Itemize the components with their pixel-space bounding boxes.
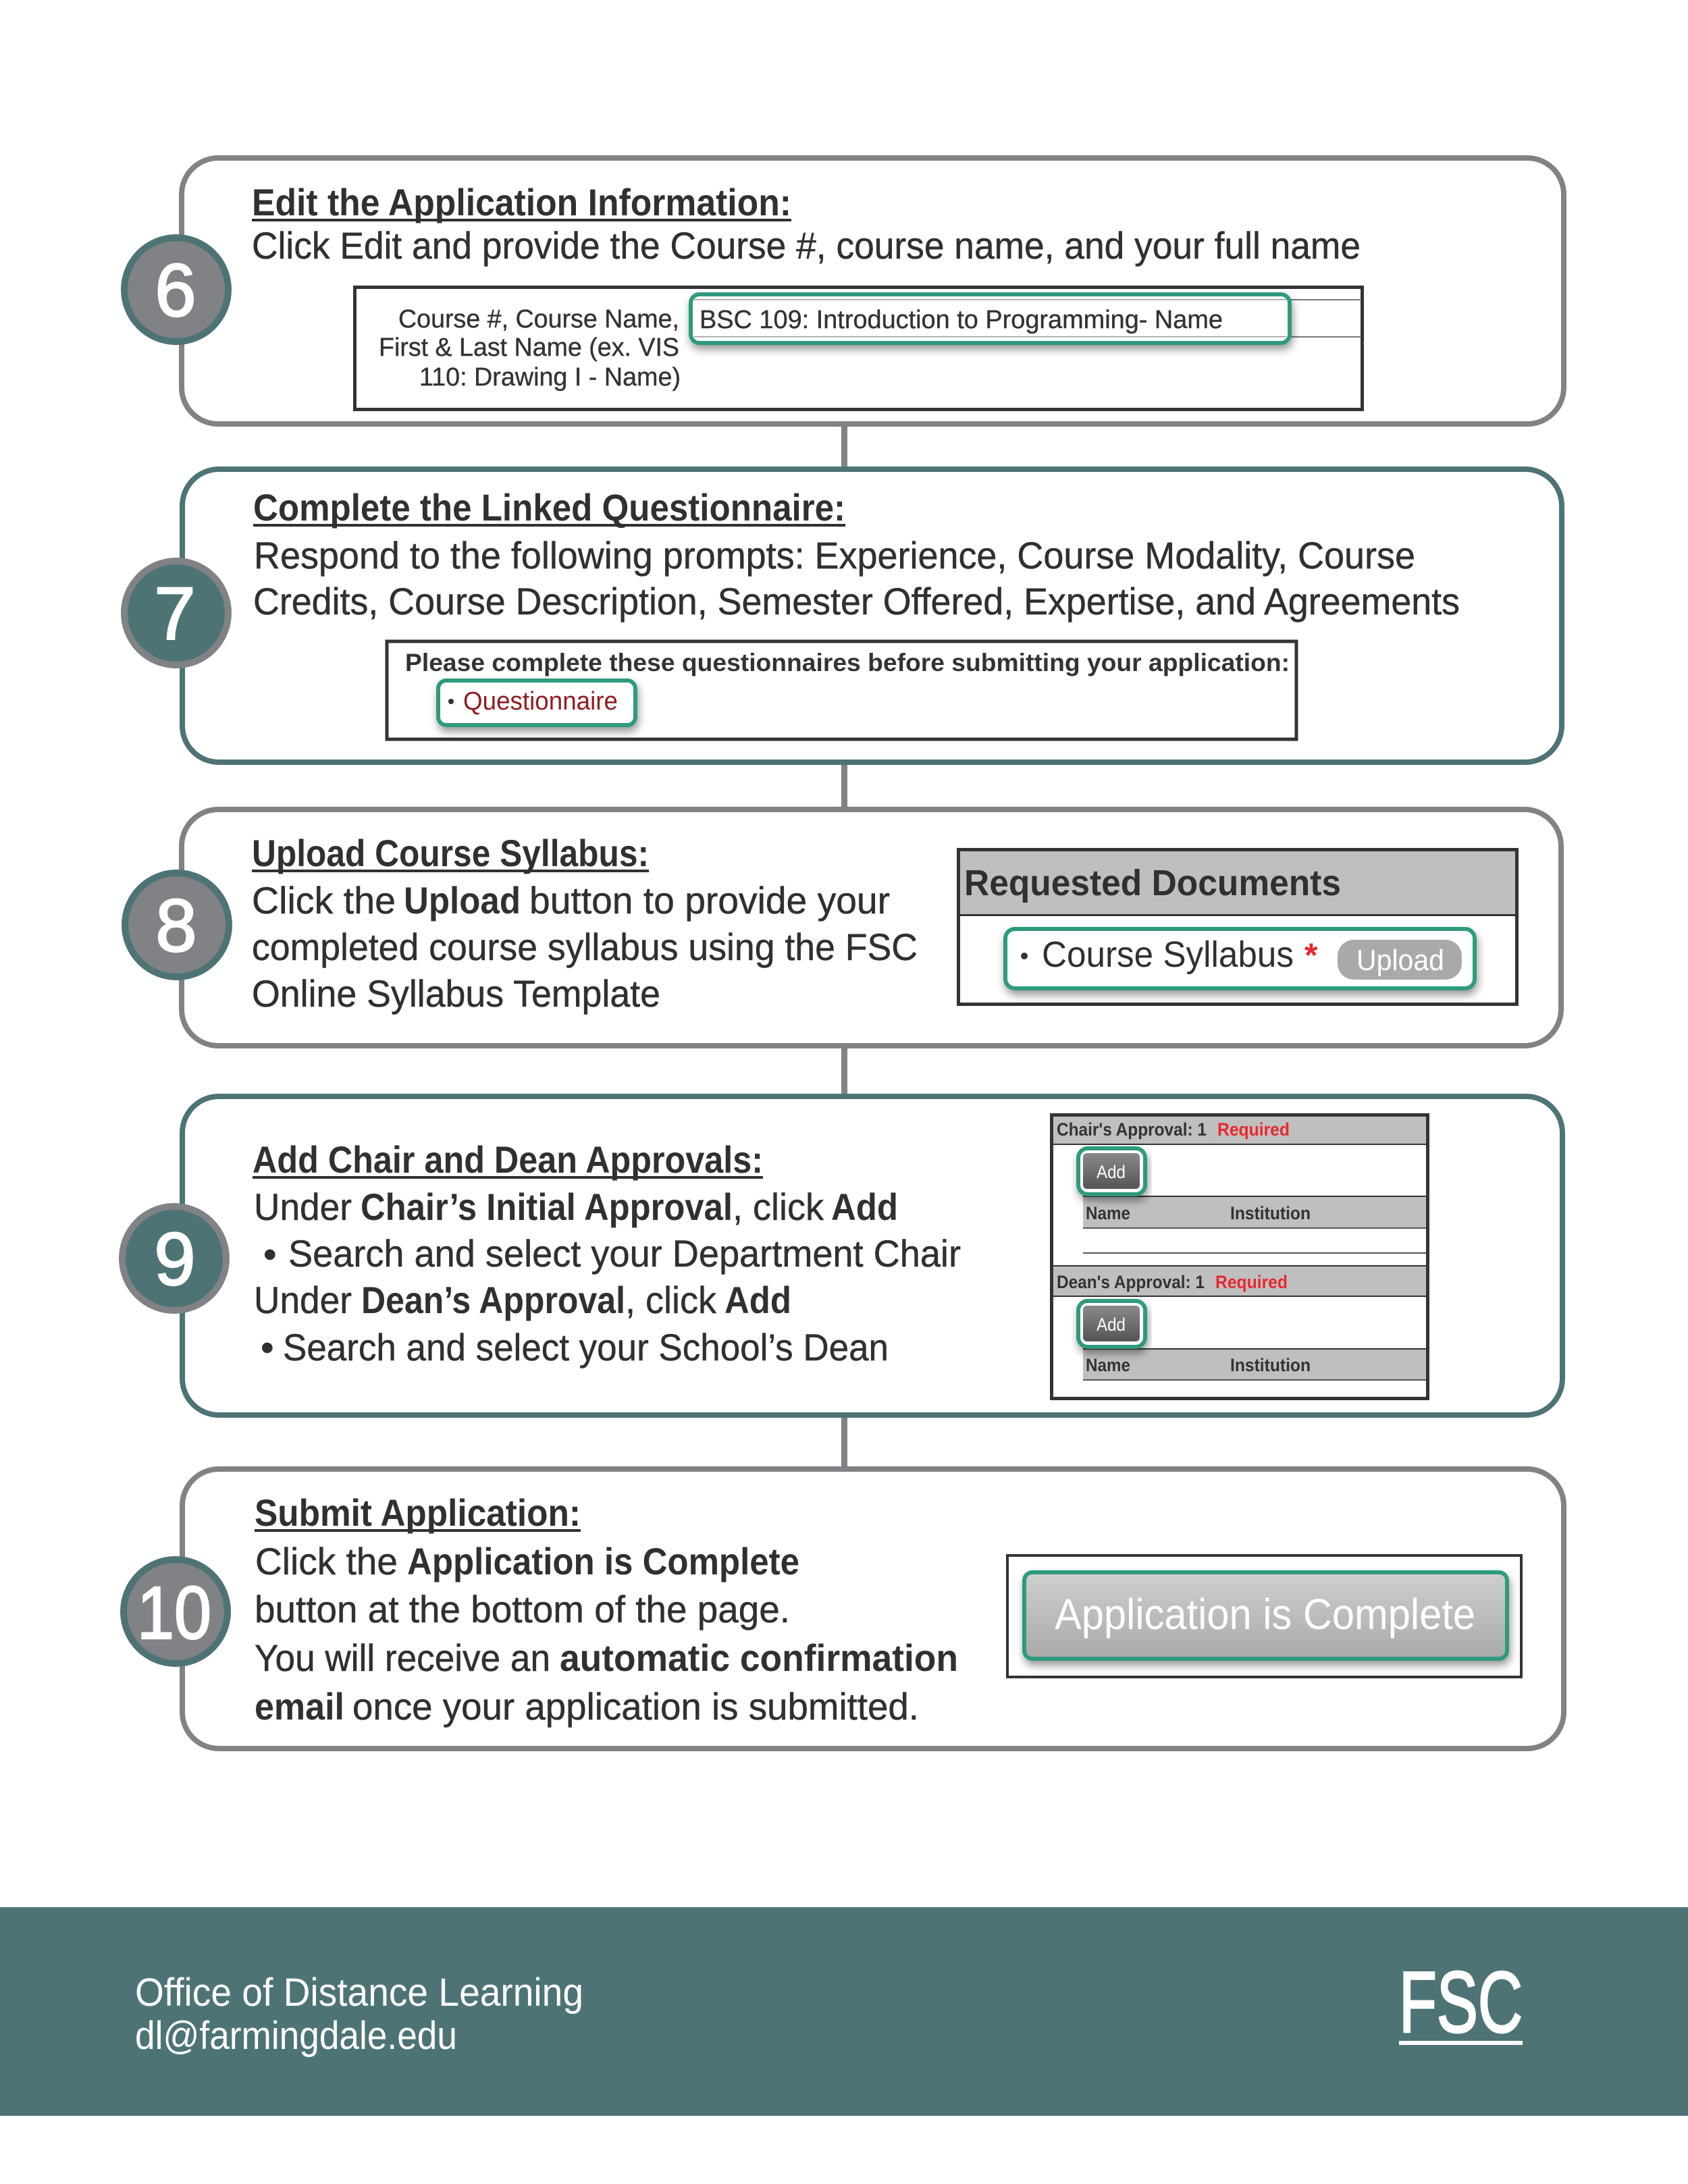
badge: number 10: 10: [137, 1572, 211, 1655]
text: step 9 instructions: •: [261, 1326, 274, 1368]
text: step 10 instructions: email: [255, 1685, 344, 1728]
text: step 9 instructions: Dean’s Approval: [361, 1279, 625, 1321]
screenshot: requested documents: *: [1304, 936, 1318, 974]
text: step 6 instruction: Click Edit and provide the Course #, course name, and your full name: [252, 224, 1361, 267]
badge: number 10: [124, 1560, 228, 1663]
text: office contact: dl@farmingdale.edu: [135, 2014, 457, 2058]
screenshot: application is complete button: Application is Complete: [1055, 1590, 1475, 1639]
text: step 8 instruction: [252, 879, 918, 1015]
highlight: name input: [691, 294, 1290, 343]
screenshot: questionnaire link: Questionnaire: [463, 687, 618, 716]
screenshot: application is complete button: [1007, 1555, 1521, 1677]
badge: number 7: [124, 561, 228, 665]
connector: step 8 to 9: [841, 1046, 847, 1096]
badge: number 8: 8: [155, 884, 197, 967]
panel: step 7 linked questionnaire: [182, 469, 1562, 762]
badge: number 6: 6: [155, 249, 196, 332]
badge: number 8: [125, 873, 229, 977]
text: step 9 instructions: Add: [831, 1186, 898, 1228]
text: step 9 instructions: Chair’s Initial Approval: [361, 1186, 733, 1228]
screenshot: questionnaire link: [387, 641, 1296, 739]
screenshot: approvals table: [1052, 1115, 1427, 1399]
highlight: questionnaire: [438, 681, 635, 725]
text: office contact: [135, 1971, 583, 2058]
text: step 9 instructions: Search and select your School’s Dean: [283, 1326, 889, 1368]
connector: step 7 to 8: [841, 762, 847, 809]
heading: complete the linked questionnaire: Complete the Linked Questionnaire:: [253, 486, 845, 529]
connector: step 9 to 10: [841, 1415, 847, 1469]
panel: step 9 chair and dean approvals: [182, 1096, 1562, 1415]
text: step 9 instructions: Under: [254, 1279, 352, 1321]
badge: number 6: [124, 238, 228, 342]
panel: step 10 submit application: [182, 1469, 1564, 1749]
badge: number 9: [122, 1206, 226, 1310]
screenshot: course name field: First & Last Name (ex. VIS: [379, 334, 679, 362]
text: step 10 instructions: [255, 1540, 958, 1728]
text: step 10 instructions: automatic confirmation: [560, 1636, 958, 1679]
button: add chair: [1078, 1148, 1145, 1194]
button: upload: Upload: [1356, 944, 1444, 977]
text: step 10 instructions: once your application is submitted.: [352, 1685, 919, 1728]
screenshot: requested documents: [958, 849, 1519, 1005]
highlight: course syllabus row: [1005, 929, 1475, 988]
button: add chair: Add: [1097, 1162, 1126, 1182]
text: step 7 instruction: [253, 534, 1460, 622]
text: step 9 instructions: Under: [254, 1186, 352, 1228]
text: office contact: Office of Distance Learning: [135, 1971, 583, 2015]
text: step 8 instruction: Click the: [252, 879, 396, 922]
text: step 10 instructions: Click the: [255, 1540, 398, 1582]
logo: FSC: FSC: [1399, 1954, 1523, 2051]
text: step 8 instruction: completed course syllabus using the FSC: [252, 926, 918, 968]
panel: step 8 upload course syllabus: [182, 809, 1561, 1046]
text: step 9 instructions: Search and select your Department Chair: [288, 1232, 961, 1275]
screenshot: approvals table: Dean's Approval: 1: [1057, 1272, 1205, 1292]
footer band: [0, 1907, 1688, 2116]
screenshot: requested documents: Course Syllabus: [1042, 934, 1294, 975]
screenshot: requested documents: Requested Documents: [964, 863, 1341, 903]
text: step 9 instructions: Add: [724, 1279, 791, 1321]
screenshot: questionnaire link: Please complete these questionnaires before submitting your application:: [405, 649, 1290, 676]
heading: add chair and dean approvals: Add Chair and Dean Approvals:: [253, 1138, 763, 1181]
heading: upload course syllabus: Upload Course Syllabus:: [252, 832, 649, 874]
text: step 9 instructions: , click: [625, 1279, 717, 1321]
screenshot: approvals table: Required: [1217, 1119, 1290, 1140]
text: step 8 instruction: Upload: [404, 879, 521, 922]
button: upload: [1338, 940, 1462, 980]
text: step 8 instruction: Online Syllabus Template: [252, 972, 660, 1015]
text: step 9 instructions: •: [263, 1233, 277, 1275]
text: step 10 instructions: You will receive an: [255, 1636, 550, 1679]
text: step 9 instructions: , click: [733, 1186, 824, 1228]
text: step 8 instruction: button to provide your: [529, 879, 890, 922]
screenshot: course name field: BSC 109: Introduction to Programming- Name: [700, 306, 1223, 334]
heading: submit application: Submit Application:: [255, 1491, 581, 1534]
badge: number 7: 7: [154, 572, 196, 656]
text: step 10 instructions: Application is Complete: [407, 1540, 799, 1582]
text: step 10 instructions: button at the bottom of the page.: [255, 1588, 790, 1630]
screenshot: course name field: 110: Drawing I - Name): [419, 363, 681, 392]
button: add dean: [1078, 1301, 1145, 1347]
screenshot: approvals table: Institution: [1230, 1203, 1311, 1223]
text: step 7 instruction: Respond to the following prompts: Experience, Course Modality, Course: [254, 534, 1415, 577]
screenshot: course name field: Course #, Course Name,: [398, 305, 679, 334]
screenshot: approvals table: Required: [1215, 1272, 1288, 1292]
badge: number 9: 9: [154, 1218, 196, 1301]
button: add dean: Add: [1097, 1314, 1126, 1335]
screenshot: approvals table: Name: [1086, 1203, 1130, 1223]
screenshot: approvals table: Chair's Approval: 1: [1057, 1119, 1207, 1140]
text: step 9 instructions: [254, 1186, 961, 1368]
panel: step 6 edit application information: [182, 158, 1564, 424]
text: step 7 instruction: Credits, Course Description, Semester Offered, Expertise, and Agreements: [253, 580, 1460, 622]
screenshot: approvals table: Institution: [1230, 1355, 1311, 1375]
screenshot: approvals table: Name: [1086, 1355, 1130, 1375]
heading: edit the application information: Edit the Application Information:: [252, 181, 791, 223]
connector: step 6 to 7: [841, 424, 847, 469]
screenshot: course name field: [355, 288, 1363, 409]
